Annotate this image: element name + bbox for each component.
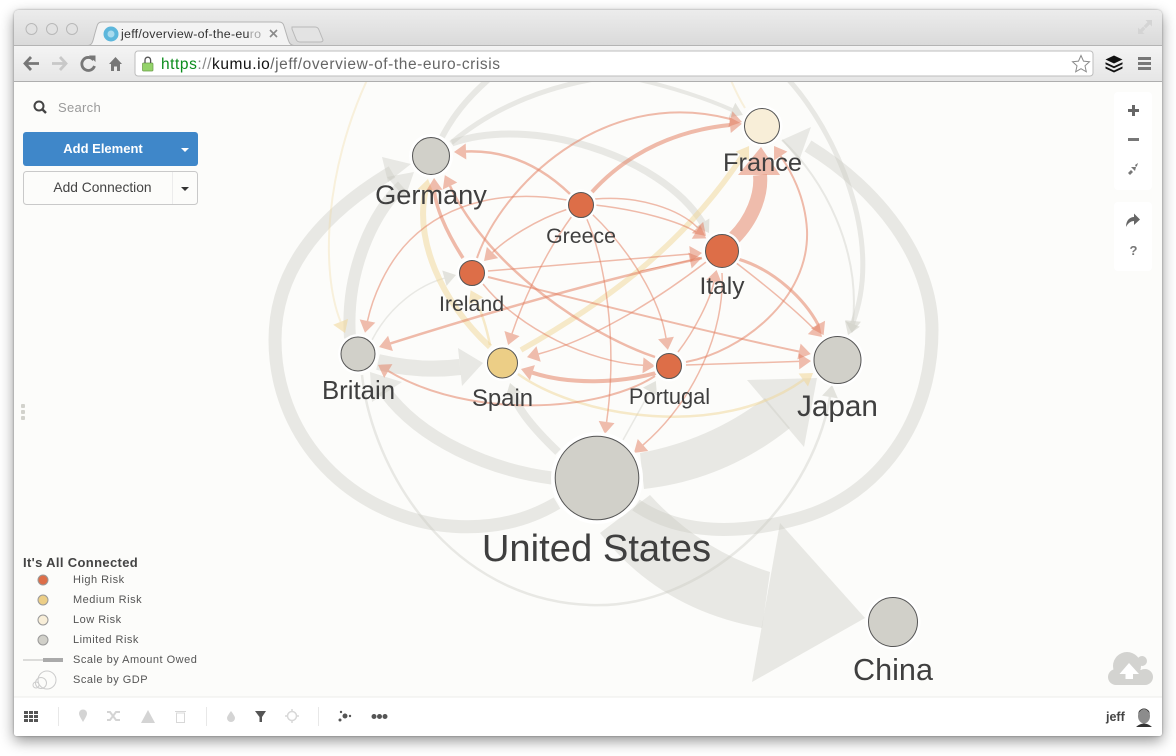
legend: medium risk: Medium Risk: [73, 594, 142, 606]
node: France: [723, 106, 802, 177]
icon: trash: [175, 712, 186, 722]
node: Italy: Italy: [700, 273, 745, 300]
edge: Britain to Italy: [640, 260, 690, 271]
icon: more: [372, 714, 388, 719]
edge: Greece to Portugal: [592, 214, 666, 338]
legend: It's All Connected: [23, 555, 138, 570]
edge: Italy to United States: [643, 273, 722, 445]
icon: layers: [1106, 56, 1122, 72]
node: Spain: Spain: [472, 385, 533, 412]
edge: Ireland to France: [477, 112, 730, 258]
icon: plus: [1128, 105, 1139, 116]
icon: filter: [255, 711, 266, 722]
edge: Greece to Germany: [466, 151, 570, 194]
user name: jeff: [1105, 710, 1126, 724]
icon: grid: [24, 711, 38, 722]
edge: Spain to Japan: [518, 374, 803, 417]
edge: United States to Britain: [370, 372, 552, 478]
edge: Portugal to Italy: [678, 282, 714, 352]
node: Greece: [546, 190, 616, 248]
edge: Germany to France over the top: [451, 78, 600, 143]
edge: Greece to Italy upper: [595, 198, 698, 228]
edge: United States to China: [600, 495, 865, 682]
edge: Greece to Britain: [368, 196, 567, 321]
edges: medium and low risk: [329, 78, 803, 417]
search box: Search: [58, 100, 101, 115]
bottom toolbar: [14, 696, 1162, 736]
legend: [23, 555, 197, 689]
icon: warning: [141, 710, 155, 723]
edge: Britain to Spain: [378, 348, 483, 386]
edge: Germany upward: [442, 78, 490, 137]
node: Britain: [322, 334, 395, 405]
toolbar: [14, 46, 1162, 82]
edge: Britain to Germany: [349, 172, 414, 338]
url text: https://kumu.io/jeff/overview-of-the-euro-crisis: [161, 56, 500, 73]
node: Portugal: Portugal: [629, 384, 710, 409]
edge: arc into France: [630, 78, 732, 110]
edge: arc into Japan: [787, 78, 863, 324]
edge: Italy to Spain: [539, 262, 706, 354]
icon: drop: [227, 711, 235, 722]
edge: Portugal to France: [686, 156, 807, 362]
icon: fullscreen: [1138, 20, 1152, 34]
share and help panel: [1114, 202, 1152, 271]
legend: high risk: High Risk: [73, 574, 125, 586]
icon: back arrow: [25, 57, 39, 70]
legend: scale by GDP: [33, 671, 148, 689]
icon: upload cloud: [1108, 652, 1153, 685]
icon: menu: [1138, 57, 1151, 70]
edge: Ireland to Germany: [434, 190, 463, 258]
active tab: jeff/overview-of-the-euro: [120, 27, 261, 41]
legend: high risk: [38, 574, 125, 586]
edge: Portugal to Japan: [686, 361, 799, 365]
icon: home: [109, 57, 122, 71]
node: Japan: [797, 334, 878, 423]
edge: Ireland to Portugal: [483, 284, 643, 365]
edge: United States to Portugal: [623, 392, 650, 440]
node: Greece: Greece: [546, 224, 616, 248]
icon: reload: [82, 56, 96, 70]
icon: cluster: [338, 711, 351, 722]
edge: Italy to Britain: [390, 258, 702, 343]
active tab: [88, 22, 294, 46]
legend: low risk: [38, 614, 122, 626]
icon: shuffle: [107, 712, 120, 720]
node: United States: [482, 432, 711, 570]
edge: Greece to United States: [586, 217, 611, 422]
new tab button: [292, 27, 323, 42]
button: add connection: [24, 172, 198, 204]
sidebar drag handle: [21, 404, 25, 420]
node: Spain: [472, 345, 533, 412]
edge: Ireland to Japan: [488, 277, 799, 352]
icon: fit: [1128, 163, 1138, 175]
icon: lock: [142, 57, 153, 71]
edge: Spain to Germany: [423, 191, 490, 347]
legend: scale by amount owed: Scale by Amount Owed: [73, 654, 197, 666]
legend: medium risk: [38, 594, 142, 606]
node: Japan: Japan: [797, 390, 878, 423]
edge: Spain to France: [521, 156, 742, 350]
node: Britain: Britain: [322, 377, 395, 405]
node: China: China: [853, 653, 934, 687]
address bar: [135, 51, 1093, 76]
edge: United States to Japan: [640, 378, 817, 489]
node: Germany: Germany: [375, 179, 487, 210]
edge: Britain to Ireland: [372, 278, 444, 340]
edge: Portugal to Spain: [532, 373, 656, 381]
edges: high risk: [368, 112, 818, 445]
node: France: France: [723, 149, 802, 177]
icon: target: [285, 709, 299, 723]
icon: pin: [79, 710, 87, 722]
button: add connection: Add Connection: [53, 180, 152, 195]
edge: France to Japan: [782, 140, 854, 321]
edge: low risk to France: [730, 78, 745, 108]
edge: Ireland to Italy: [488, 254, 690, 271]
legend: limited risk: Limited Risk: [73, 634, 139, 646]
edge: United States to France: [636, 127, 932, 529]
edge: Italy to Japan thin: [735, 262, 814, 328]
node: Portugal: [629, 350, 710, 409]
edge: Britain to Japan underneath: [362, 375, 830, 605]
node: Italy: [700, 232, 745, 300]
node: Ireland: Ireland: [439, 292, 504, 316]
icon: star: [1072, 56, 1090, 72]
edge: Greece to Spain: [512, 216, 572, 334]
edge: Italy to France: [734, 147, 780, 238]
edge: Germany to Italy: [452, 134, 703, 223]
legend: limited risk: [38, 634, 139, 646]
window controls: [26, 24, 78, 34]
icon: help: ?: [1130, 243, 1138, 258]
edge: Italy to Japan thick: [738, 259, 818, 324]
legend: low risk: Low Risk: [73, 614, 122, 626]
edge: low risk to Britain: [329, 78, 368, 322]
edge: Greece to Ireland: [492, 209, 568, 252]
edges: limited risk: [275, 78, 932, 682]
node: Germany: [375, 134, 487, 210]
zoom controls panel: [1114, 92, 1152, 190]
network graph: [275, 78, 934, 687]
edge: Greece to France: [592, 125, 730, 192]
node: Ireland: [439, 258, 504, 316]
edge: Spain to Ireland: [476, 301, 490, 345]
tab strip: [14, 10, 1162, 46]
icon: share: [1126, 214, 1140, 227]
icon: forward arrow: [52, 57, 66, 70]
icon: search: [34, 102, 46, 113]
edge: Portugal to Britain: [388, 371, 655, 405]
node: United States: United States: [482, 527, 711, 570]
edge: United States to Spain: [513, 394, 558, 452]
button: add element: Add Element: [63, 141, 143, 156]
edge: Portugal to Germany: [450, 186, 655, 357]
icon: minus: [1128, 138, 1139, 141]
search box: [34, 100, 101, 115]
avatar: [1136, 708, 1152, 727]
edge: United States to Germany: [275, 157, 557, 527]
legend: scale by GDP: Scale by GDP: [73, 674, 148, 686]
edge: Greece to Italy lower: [595, 205, 696, 232]
node: China: [853, 594, 934, 687]
button: add element: [23, 132, 198, 166]
